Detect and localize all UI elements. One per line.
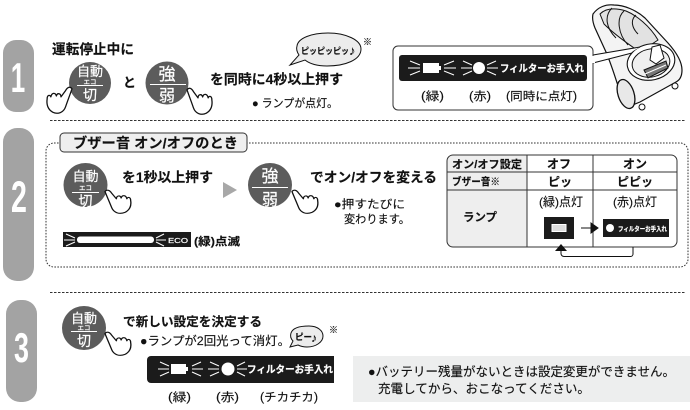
button: 自動 エコ 切: 自動: [71, 311, 97, 326]
icon: right hand: [187, 88, 212, 114]
button: 自動 エコ 切: 自動: [77, 64, 103, 79]
lamp labels, step 3: (チカチカ): [260, 391, 318, 404]
step 2 badge: 2: [11, 172, 27, 221]
panel heading: ブザー音 オン/オフのとき: [73, 135, 238, 151]
button: 自動 エコ 切: 切: [83, 87, 97, 103]
step 1 badge: 1: [11, 55, 25, 102]
step 3 badge: 3: [14, 325, 29, 372]
speech bubble: ピッピッピッ: ♪: [349, 43, 356, 58]
step 3 badge: [6, 300, 37, 402]
note: each press: 変わります。: [344, 213, 410, 226]
panel: lamp indicators, step 1: (同時に点灯): [506, 90, 577, 103]
speech bubble: ピッピッピッ: ピッピッピッ: [301, 46, 349, 56]
button: 強 弱: [146, 62, 188, 105]
button: 自動 エコ 切: エコ: [79, 184, 92, 192]
table: settings: (赤)点灯: [613, 195, 657, 209]
button: 自動 エコ 切: 自動: [72, 169, 99, 184]
lamp strip, step 3: フィルターお手入れ: [247, 363, 333, 376]
note: each press: ●押すたびに: [334, 197, 405, 211]
button: 強 弱: 弱: [262, 191, 278, 209]
table: settings: (緑)点灯: [539, 195, 583, 209]
icon: hand: [105, 190, 131, 213]
lamp labels, step 3: (赤): [216, 391, 239, 404]
icon: left hand: [47, 87, 72, 113]
table: settings: [447, 155, 677, 256]
speech bubble: ピッピッピッ: [290, 33, 361, 66]
button: 自動 エコ 切: エコ: [78, 324, 90, 332]
speech bubble: ピー: [290, 326, 323, 347]
speech bubble: ピー: ピー: [295, 332, 312, 342]
button: 強 弱: 強: [262, 167, 278, 186]
step 3 note: ●ランプが2回光って消灯。: [140, 333, 290, 348]
arrow: next: [223, 182, 237, 198]
step 3 instruction: で新しい設定を決定する: [123, 314, 262, 329]
lamp: filter: [603, 219, 669, 237]
arrow: off to on: [581, 223, 598, 233]
table: settings: オン: [623, 157, 647, 171]
lamp strip, step 1: フィルターお手入れ: [500, 62, 584, 75]
panel: buzzer on/off: [46, 133, 688, 267]
callout: battery note: [353, 356, 690, 402]
lamp strip, step 3: [147, 356, 334, 383]
step 1 instruction: を同時に4秒以上押す: [210, 71, 343, 87]
button: 自動 エコ 切: 切: [77, 333, 91, 349]
ECO lamp strip: [63, 232, 191, 247]
button: 自動 エコ 切: 切: [78, 193, 92, 209]
icon: vacuum cleaner: [593, 5, 682, 111]
lamp labels, step 1: (緑): [421, 90, 444, 103]
callout: battery note: 充電してから、おこなってください。: [378, 382, 590, 396]
table: settings: ランプ: [463, 211, 497, 224]
table: settings: ピッ: [548, 175, 572, 189]
instruction: toggle: でオン/オフを変える: [310, 170, 437, 185]
step 1 note: ● ランプが点灯。: [252, 96, 338, 110]
table: settings: ブザー音※: [452, 175, 500, 188]
step 2 badge: [3, 128, 34, 281]
reference mark: ※: [329, 325, 338, 335]
button: 強 弱: 強: [158, 65, 176, 84]
button: 強 弱: 弱: [159, 87, 175, 105]
arrow: on back to off: [561, 246, 633, 256]
step 1 heading: 運転停止中に: [52, 41, 134, 57]
lamp: battery: [544, 217, 574, 239]
lamp strip, step 1: [399, 55, 587, 81]
step 1 badge: [3, 40, 34, 112]
speech bubble: ピー: ♪: [311, 331, 317, 345]
connector: と: と: [123, 75, 136, 90]
instruction: press 1 second: を1秒以上押す: [122, 169, 213, 185]
lamp labels, step 3: [168, 391, 318, 404]
table: settings: ピピッ: [617, 175, 653, 189]
button: 自動 エコ 切: [64, 163, 108, 209]
icon: hand: [105, 332, 131, 355]
ECO lamp strip: ECO: [168, 238, 189, 245]
note: each press: [334, 197, 410, 226]
table: settings: オフ: [547, 157, 571, 171]
button: 自動 エコ 切: エコ: [84, 78, 96, 86]
panel: lamp indicators, step 1: [393, 46, 640, 110]
button: 自動 エコ 切: [69, 62, 111, 104]
lamp: filter: フィルターお手入れ: [618, 224, 667, 233]
table: settings: オン/オフ設定: [452, 158, 522, 171]
ECO lamp label: (緑)点滅: [194, 234, 240, 248]
callout: battery note: ●バッテリー残量がないときは設定変更ができません。: [368, 364, 675, 379]
lamp labels, step 3: (緑): [168, 391, 191, 404]
panel: lamp indicators, step 1: (赤): [469, 90, 491, 103]
reference mark: ※: [363, 37, 372, 47]
button: 強 弱: [248, 163, 292, 209]
button: 自動 エコ 切: [62, 306, 106, 350]
icon: hand: [292, 190, 318, 213]
arrowhead: on back to off: [555, 244, 567, 251]
